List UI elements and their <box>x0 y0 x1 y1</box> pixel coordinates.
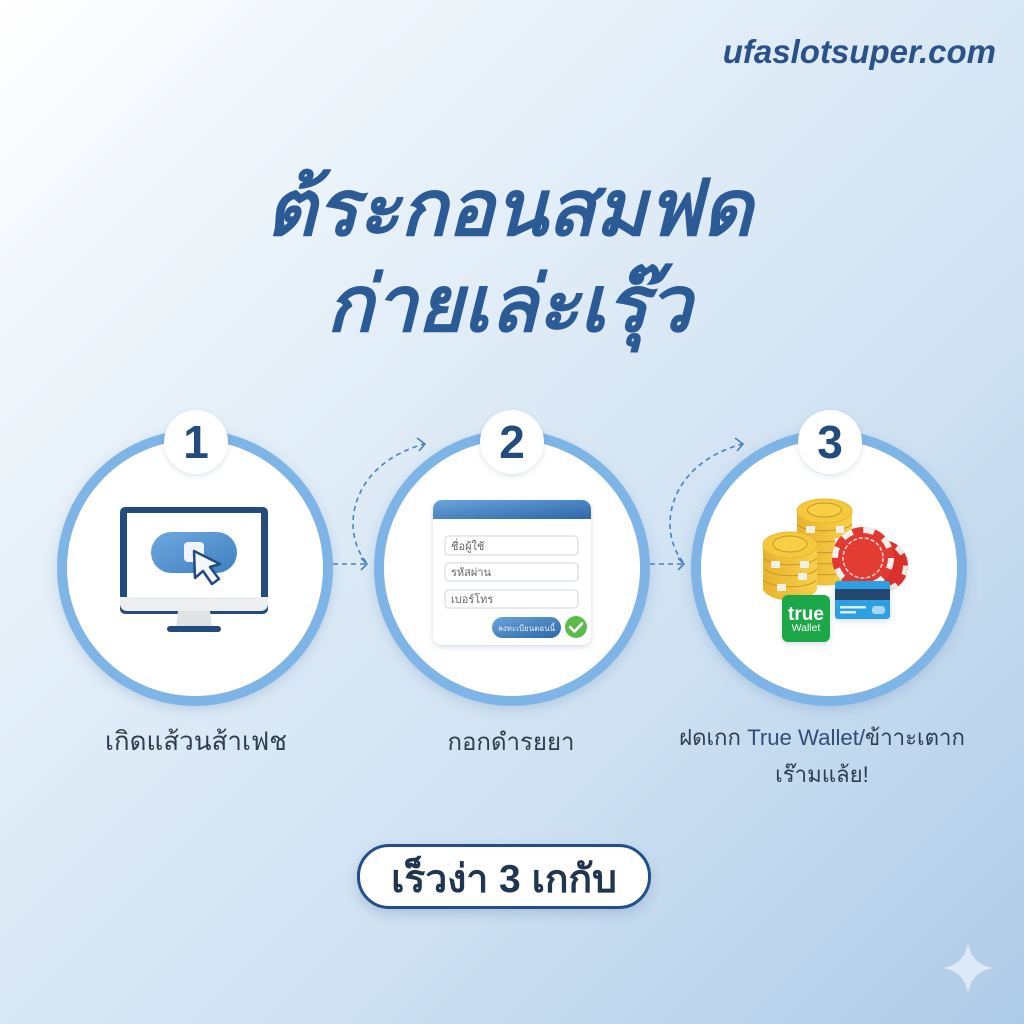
step 3 label: เร๊ามแล้ย! <box>775 762 869 787</box>
circle 3 <box>696 435 962 701</box>
icon: registration form: ลงทะเบียนตอนนี้ <box>498 622 556 633</box>
step number 1: 1 <box>183 416 209 468</box>
step number 1 <box>164 410 228 474</box>
sparkle <box>943 943 993 993</box>
icon: registration form: เบอร์โทร <box>451 592 493 606</box>
arrow 1 to 2 <box>333 438 425 570</box>
icon: registration form: ชื่อผู้ใช้ <box>451 538 484 553</box>
gold chip stack back <box>797 499 853 586</box>
website url: ufaslotsuper.com <box>723 33 996 70</box>
badge: quick 3 steps <box>357 844 651 909</box>
step 2 label: กอกดำรยยา <box>447 729 575 756</box>
badge: quick 3 steps: เร็วง่า 3 เกกับ <box>391 858 617 901</box>
icon: monitor with button and cursor <box>120 507 268 632</box>
step 1 label: เกิดแส้วนส้าเฟช <box>105 726 287 756</box>
true wallet badge: true <box>788 604 824 625</box>
circle 2 <box>379 435 645 701</box>
step number 3 <box>798 410 862 474</box>
icon: registration form: รหัสผ่าน <box>451 567 491 579</box>
step number 2 <box>480 410 544 474</box>
title: ต้ระกอนสมฟด <box>266 164 752 252</box>
title <box>266 164 755 352</box>
gold chip stack front <box>763 532 817 600</box>
icon: registration form <box>433 500 591 645</box>
true wallet badge: Wallet <box>792 622 820 634</box>
title: ก่ายเล่ะเรุ๊ว <box>326 260 692 348</box>
arrow 2 to 3 <box>650 438 743 570</box>
red chips <box>832 527 908 592</box>
true wallet badge <box>782 595 830 642</box>
step 3 label: ฝดเกก True Wallet/ข้าาะเตาก <box>679 725 965 750</box>
step number 3: 3 <box>817 416 843 468</box>
step 3 label <box>679 725 965 787</box>
credit card <box>835 581 890 619</box>
icon: chips, true wallet and card <box>763 499 908 642</box>
circle 1 <box>62 435 328 701</box>
step number 2: 2 <box>499 416 525 468</box>
